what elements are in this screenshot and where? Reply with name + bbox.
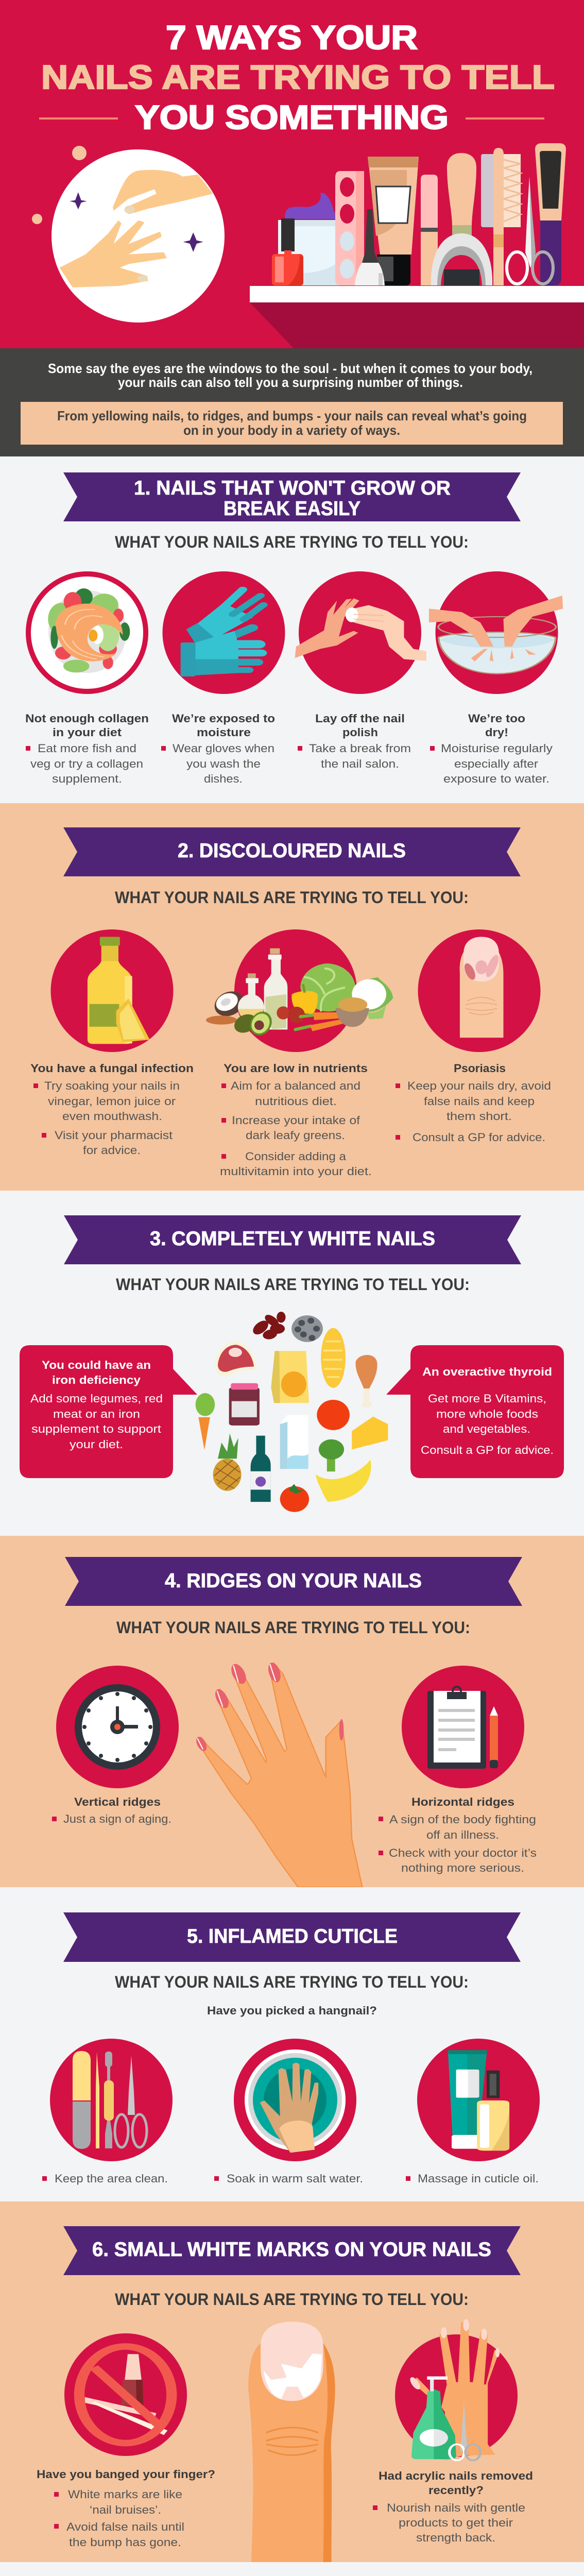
text: keep clean: Keep the area clean. (55, 2172, 168, 2185)
callout: iron deficiency: You could have an (42, 1359, 151, 1371)
subheading: WHAT YOUR NAILS ARE TRYING TO TELL YOU: (115, 1973, 469, 1991)
cereal bag (271, 1351, 309, 1403)
text: too dry: Moisturise regularly (441, 742, 553, 755)
text: not enough collagen: supplement. (52, 772, 122, 785)
illustration: food circle (196, 1312, 388, 1512)
text: psoriasis: Psoriasis (454, 1062, 506, 1075)
icon: cream jar (278, 193, 352, 285)
text: not enough collagen: in your diet (53, 726, 122, 739)
callout box: From yellowing nails, to ridges, and bumps - your nails can reveal what’s going (57, 408, 527, 423)
intro text: Some say the eyes are the windows to the soul - but when it comes to your body, (48, 361, 533, 376)
icon: long brush (535, 143, 566, 285)
question text: Have you picked a hangnail? (207, 2004, 377, 2017)
heading ribbon: 2. DISCOLOURED NAILS (178, 840, 406, 862)
milk carton (280, 1415, 308, 1469)
text: exposed to moisture: We’re exposed to (172, 712, 275, 725)
panel: section 2 (0, 803, 584, 1191)
icon: clock (56, 1666, 179, 1788)
chicken leg (355, 1355, 377, 1408)
text: lay off the polish: the nail salon. (321, 757, 399, 770)
shelf shadow (250, 302, 584, 348)
icon: tube and cuticle oil (417, 2039, 540, 2161)
text: not enough collagen: Not enough collagen (25, 712, 149, 725)
text: psoriasis: Consult a GP for advice. (413, 1131, 545, 1144)
text: exposed to moisture: Wear gloves when (173, 742, 274, 755)
text: banged finger: the bump has gone. (69, 2536, 181, 2549)
text: massage: Massage in cuticle oil. (418, 2172, 539, 2185)
title (39, 19, 555, 136)
text: horizontal ridges: Check with your doctor it’s (389, 1846, 537, 1859)
icon: removing nail polish (295, 571, 426, 694)
text: exposed to moisture: dishes. (204, 772, 243, 785)
callout: overactive thyroid: An overactive thyroid (422, 1365, 552, 1378)
icon: hands soaking in bowl (429, 571, 563, 694)
text: horizontal ridges: Horizontal ridges (411, 1795, 514, 1808)
text: banged finger: ‘nail bruises’. (90, 2503, 161, 2516)
tomato (280, 1484, 309, 1512)
text: lay off the polish: Take a break from (309, 742, 411, 755)
callout: iron deficiency: supplement to support (31, 1422, 161, 1435)
icon: toe separator (335, 171, 364, 285)
text: fungal infection: for advice. (83, 1144, 141, 1157)
jam jar (229, 1383, 260, 1426)
text: vertical ridges: Just a sign of aging. (63, 1812, 171, 1825)
callout: overactive thyroid: more whole foods (436, 1408, 538, 1420)
text: acrylic nails: products to get their (399, 2516, 513, 2529)
broccoli (319, 1439, 344, 1471)
text: horizontal ridges: A sign of the body fighting (389, 1813, 536, 1826)
text: acrylic nails: Nourish nails with gentle (387, 2501, 525, 2514)
text: lay off the polish: Lay off the nail (315, 712, 405, 725)
text: fungal infection (30, 1062, 194, 1157)
illustration: hands in manicure oval (32, 146, 225, 323)
heading ribbon (63, 2226, 521, 2275)
icon: red nail polish (272, 218, 303, 285)
text: low in nutrients: multivitamin into your diet. (220, 1165, 372, 1178)
icon: salmon salad plate (28, 574, 146, 691)
heading ribbon: 1. NAILS THAT WON'T GROW OR (134, 477, 451, 499)
panel: section 6 (0, 2201, 584, 2562)
icon: nail dryer and paddle (431, 153, 492, 285)
text: acrylic nails: strength back. (416, 2531, 495, 2544)
text: vertical ridges (52, 1795, 171, 1825)
heading ribbon: BREAK EASILY (224, 498, 360, 520)
text: too dry: exposure to water. (443, 772, 549, 785)
panel: section 5 (0, 1887, 584, 2201)
icon: oils and vegetables (206, 929, 393, 1052)
heading ribbon: 6. SMALL WHITE MARKS ON YOUR NAILS (92, 2239, 491, 2261)
heading ribbon (63, 472, 521, 521)
text: low in nutrients: dark leafy greens. (246, 1129, 345, 1142)
icon: vinegar bottle and lemon (50, 929, 173, 1052)
text: banged finger: White marks are like (68, 2488, 182, 2501)
subheading: WHAT YOUR NAILS ARE TRYING TO TELL YOU: (115, 888, 469, 907)
text: low in nutrients: Aim for a balanced and (231, 1079, 360, 1092)
cheese (352, 1417, 388, 1449)
icon: cuticle scissors (507, 177, 553, 284)
text: banged finger: Have you banged your finger? (37, 2468, 215, 2481)
heading ribbon (63, 827, 521, 876)
icon: no polish sign (64, 2333, 187, 2456)
text: low in nutrients: Increase your intake of (232, 1114, 360, 1127)
text: low in nutrients: You are low in nutrients (224, 1062, 368, 1075)
text: exposed to moisture (161, 712, 275, 785)
text: banged finger (37, 2468, 215, 2549)
intro text: your nails can also tell you a surprising number of things. (118, 375, 463, 390)
apple (317, 1400, 350, 1430)
icon: pink nail file (421, 175, 438, 285)
panel: hero header (0, 0, 584, 348)
text: banged finger: Avoid false nails until (66, 2520, 184, 2533)
text: horizontal ridges (379, 1795, 537, 1874)
text: lay off the polish (298, 712, 411, 770)
icon: manicure tools (50, 2039, 173, 2161)
icon: hand in soak bowl (234, 2039, 356, 2161)
title: 7 WAYS YOUR (166, 19, 418, 56)
icon: rubber gloves (163, 571, 285, 694)
text: low in nutrients (220, 1062, 372, 1178)
text: exposed to moisture: you wash the (186, 757, 261, 770)
heading ribbon (64, 1215, 521, 1264)
icon: psoriasis finger (418, 929, 541, 1052)
callout: overactive thyroid: Consult a GP for advice. (421, 1444, 554, 1456)
icon: beige tube (368, 157, 419, 285)
text: not enough collagen (25, 712, 149, 785)
banana (316, 1460, 371, 1502)
text: acrylic nails: Had acrylic nails removed (379, 2469, 533, 2482)
text: acrylic nails (373, 2469, 533, 2544)
text: not enough collagen: Eat more fish and (38, 742, 136, 755)
callout: iron deficiency (20, 1345, 197, 1478)
text: fungal infection: Try soaking your nails in (44, 1079, 180, 1092)
callout: iron deficiency: iron deficiency (52, 1374, 141, 1386)
callout: overactive thyroid: Get more B Vitamins, (428, 1392, 546, 1405)
heading ribbon: 4. RIDGES ON YOUR NAILS (165, 1570, 422, 1592)
text: too dry: We’re too (468, 712, 525, 725)
text: fungal infection: even mouthwash. (62, 1110, 162, 1123)
text: too dry: especially after (454, 757, 538, 770)
heading ribbon: 5. INFLAMED CUTICLE (187, 1925, 398, 1947)
callout: overactive thyroid: and vegetables. (443, 1422, 530, 1435)
icon: clear polish (355, 209, 385, 285)
icon: hand with lotion and scissors (395, 2319, 518, 2461)
text: psoriasis: Keep your nails dry, avoid (407, 1079, 551, 1092)
text: too dry: dry! (485, 726, 508, 739)
panel: section 1 (0, 456, 584, 803)
text: low in nutrients: nutritious diet. (255, 1095, 337, 1108)
illustration: finger with white marks (248, 2321, 335, 2562)
text: too dry (430, 712, 553, 785)
seeds (291, 1315, 323, 1342)
carrot (196, 1393, 215, 1450)
steak (215, 1342, 257, 1376)
text: low in nutrients: Consider adding a (245, 1150, 347, 1163)
intro text (48, 361, 533, 390)
panel: section 7 (0, 2562, 584, 2576)
text: acrylic nails: recently? (428, 2484, 484, 2497)
wine bottle (251, 1436, 271, 1502)
icon: clipboard and pencil (402, 1666, 524, 1788)
subheading: WHAT YOUR NAILS ARE TRYING TO TELL YOU: (116, 1275, 470, 1294)
text: lay off the polish: polish (342, 726, 378, 739)
callout box (21, 402, 563, 445)
title: NAILS ARE TRYING TO TELL (41, 58, 555, 96)
text: psoriasis (396, 1062, 551, 1144)
callout: iron deficiency: meat or an iron (53, 1408, 140, 1420)
text: soak: Soak in warm salt water. (227, 2172, 363, 2185)
subheading: WHAT YOUR NAILS ARE TRYING TO TELL YOU: (115, 533, 469, 551)
panel: section 4 (0, 1536, 584, 1887)
panel: introduction band (0, 348, 584, 456)
callout box: on in your body in a variety of ways. (183, 422, 400, 438)
callout: iron deficiency: your diet. (70, 1438, 123, 1451)
heading ribbon: 3. COMPLETELY WHITE NAILS (150, 1228, 435, 1250)
text: psoriasis: them short. (446, 1110, 512, 1123)
text: horizontal ridges: off an illness. (426, 1828, 499, 1841)
text: fungal infection: vinegar, lemon juice or (48, 1095, 176, 1108)
callout: overactive thyroid (386, 1345, 564, 1478)
title: YOU SOMETHING (135, 98, 449, 136)
panel: section 3 (0, 1191, 584, 1536)
heading ribbon (63, 1912, 521, 1962)
text: psoriasis: false nails and keep (424, 1095, 535, 1108)
text: exposed to moisture: moisture (197, 726, 251, 739)
text: fungal infection: You have a fungal infection (30, 1062, 194, 1075)
subheading: WHAT YOUR NAILS ARE TRYING TO TELL YOU: (115, 2290, 469, 2309)
kidney beans (250, 1312, 286, 1341)
text: fungal infection: Visit your pharmacist (55, 1129, 173, 1142)
illustration: hand with ridged nails (194, 1662, 362, 1887)
illustration: shelf of nail tools (250, 143, 584, 302)
callout: iron deficiency: Add some legumes, red (30, 1392, 163, 1405)
baguette (321, 1328, 346, 1388)
text: not enough collagen: veg or try a collagen (30, 757, 143, 770)
icon: pumice brush (481, 148, 521, 285)
text: horizontal ridges: nothing more serious. (401, 1861, 524, 1874)
subheading: WHAT YOUR NAILS ARE TRYING TO TELL YOU: (116, 1618, 470, 1637)
heading ribbon (65, 1557, 522, 1606)
pineapple (213, 1433, 242, 1491)
text: vertical ridges: Vertical ridges (74, 1795, 161, 1808)
